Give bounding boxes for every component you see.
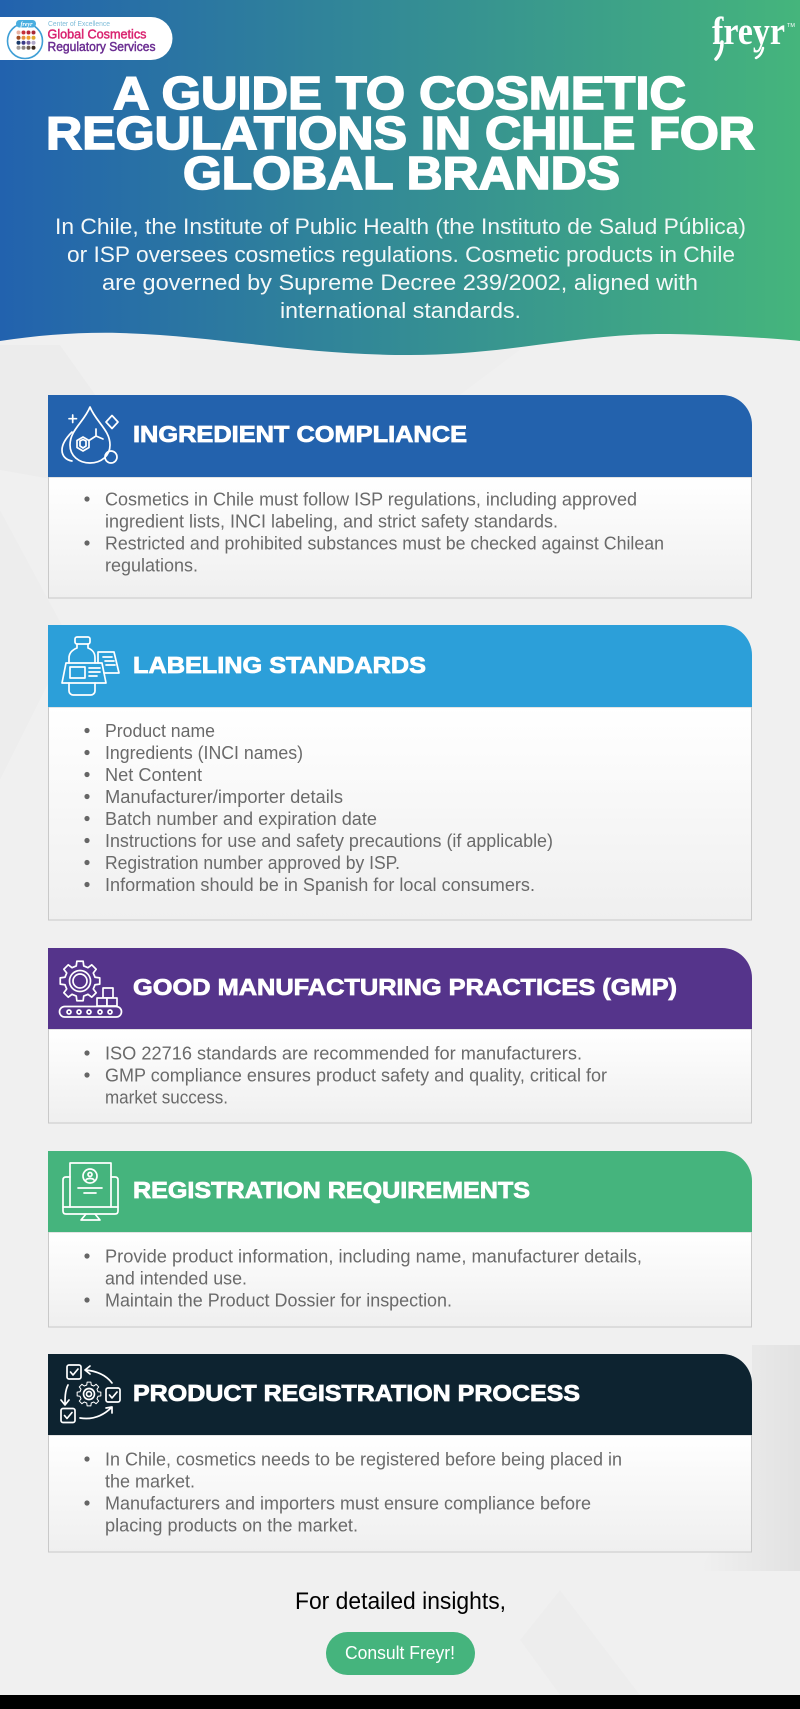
bullet list: good manufacturing practices: ISO 22716 standards are recommended for manufacturers. — [105, 1043, 582, 1063]
panel: good manufacturing practices — [48, 948, 752, 1123]
bullet list: ingredient compliance — [84, 489, 664, 575]
logo: Global Cosmetics Regulatory Services badge: Center of Excellence — [48, 19, 110, 28]
bullet list: good manufacturing practices: GMP compliance ensures product safety and quality, critical for — [105, 1065, 607, 1085]
panel header: registration requirements — [48, 1151, 752, 1232]
bullet list: product registration process: the market. — [105, 1471, 195, 1491]
bullet list: labeling standards: Registration number approved by ISP. — [105, 853, 400, 873]
title — [46, 67, 755, 199]
icon: gear and conveyor — [60, 961, 122, 1017]
bullet list: registration requirements — [84, 1246, 642, 1310]
bullet list: registration requirements: Maintain the Product Dossier for inspection. — [105, 1290, 452, 1310]
bullet list: product registration process — [84, 1449, 622, 1535]
bullet list: good manufacturing practices — [84, 1043, 607, 1107]
title: REGULATIONS IN CHILE FOR — [46, 107, 755, 159]
icon: process cycle with gear and checkboxes — [61, 1365, 120, 1422]
bullet list: product registration process: Manufacturers and importers must ensure compliance before — [105, 1493, 591, 1513]
heading: registration requirements: REGISTRATION REQUIREMENTS — [133, 1177, 530, 1203]
title: GLOBAL BRANDS — [183, 147, 620, 199]
bullet list: good manufacturing practices: market success. — [105, 1087, 228, 1107]
logo: Global Cosmetics Regulatory Services badge: Global Cosmetics — [48, 26, 147, 42]
call to action text: For detailed insights, — [295, 1588, 506, 1615]
bullet list: labeling standards — [84, 721, 553, 895]
panel header: labeling standards — [48, 625, 752, 707]
heading: product registration process: PRODUCT REGISTRATION PROCESS — [133, 1380, 580, 1406]
title: A GUIDE TO COSMETIC — [113, 67, 686, 119]
header gradient banner with wave edge — [0, 0, 800, 355]
logo: Global Cosmetics Regulatory Services badge: freyr — [20, 22, 33, 28]
bullet list: labeling standards: Net Content — [105, 765, 202, 785]
bullet list: labeling standards: Instructions for use and safety precautions (if applicable) — [105, 831, 553, 851]
heading: labeling standards: LABELING STANDARDS — [133, 652, 426, 678]
logo: Global Cosmetics Regulatory Services badge — [0, 17, 172, 60]
logo: freyr: TM — [787, 23, 795, 29]
bullet list: labeling standards: Information should be in Spanish for local consumers. — [105, 875, 535, 895]
bullet list: labeling standards: Batch number and expiration date — [105, 809, 377, 829]
logo: Global Cosmetics Regulatory Services badge: Regulatory Services — [48, 39, 156, 54]
bullet list: ingredient compliance: regulations. — [105, 555, 198, 575]
bullet list: ingredient compliance: ingredient lists, INCI labeling, and strict safety standards. — [105, 511, 558, 531]
bullet list: ingredient compliance: Cosmetics in Chile must follow ISP regulations, including approved — [105, 489, 637, 509]
heading: ingredient compliance: INGREDIENT COMPLIANCE — [133, 421, 467, 447]
bullet list: product registration process: In Chile, cosmetics needs to be registered before being placed in — [105, 1449, 622, 1469]
panel header: ingredient compliance — [48, 395, 752, 477]
icon: ingredient droplet — [62, 407, 118, 463]
intro text: international standards. — [280, 298, 521, 323]
bullet list: labeling standards: Product name — [105, 721, 215, 741]
panel: product registration process — [48, 1354, 752, 1552]
panel: ingredient compliance — [48, 395, 752, 598]
bullet list: labeling standards: Ingredients (INCI names) — [105, 743, 303, 763]
button: Consult Freyr: Consult Freyr! — [345, 1642, 455, 1663]
bullet list: product registration process: placing products on the market. — [105, 1515, 358, 1535]
icon: labeled bottle — [62, 637, 119, 695]
panel: registration requirements — [48, 1151, 752, 1327]
button: Consult Freyr — [326, 1632, 475, 1675]
bullet list: registration requirements: Provide product information, including name, manufacturer details, — [105, 1246, 642, 1266]
intro text: In Chile, the Institute of Public Health (the Instituto de Salud Pública) — [55, 214, 746, 239]
panel header: product registration process — [48, 1354, 752, 1435]
bullet list: ingredient compliance: Restricted and prohibited substances must be checked against Chilean — [105, 533, 664, 553]
heading: good manufacturing practices: GOOD MANUFACTURING PRACTICES (GMP) — [133, 974, 677, 1000]
intro text — [55, 214, 746, 323]
bullet list: labeling standards: Manufacturer/importer details — [105, 787, 343, 807]
logo: freyr: freyr — [712, 10, 785, 53]
icon: monitor with document — [63, 1163, 118, 1220]
panel header: good manufacturing practices — [48, 948, 752, 1029]
intro text: are governed by Supreme Decree 239/2002, aligned with — [102, 270, 698, 295]
intro text: or ISP oversees cosmetics regulations. Cosmetic products in Chile — [67, 242, 735, 267]
panel: labeling standards — [48, 625, 752, 920]
bullet list: registration requirements: and intended use. — [105, 1268, 247, 1288]
